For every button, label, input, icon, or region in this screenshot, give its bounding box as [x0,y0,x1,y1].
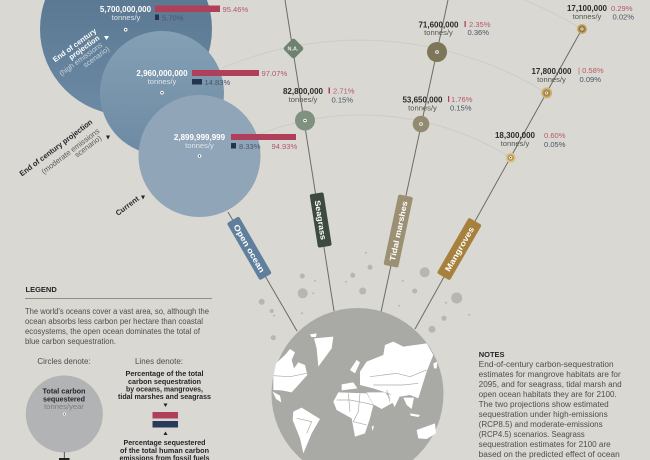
tidal marsh data: upper: 0.36% [468,28,489,37]
sequestration arcs [222,0,582,158]
seagrass data: 2.71% [333,86,355,96]
open ocean moderate emissions data: 2,960,000,000 [136,69,188,78]
open ocean current data: 94.93% [272,142,298,151]
open ocean moderate emissions data: 14.83% [204,78,231,87]
open ocean current data: 2,899,999,999 [174,133,226,142]
label: high emissions projection: (high emissions [57,40,104,78]
open ocean high emissions data: tonnes/y [112,13,141,22]
open ocean moderate emissions data: tonnes/y [148,77,177,86]
mangrove node: lower [506,153,516,163]
lines key: of the total human carbon [120,446,209,455]
notes: (RCP4.5) scenarios. Seagrass [479,430,585,439]
legend text [25,307,210,346]
mangrove node: upper [577,24,587,34]
label: moderate emissions projection: scenario) [73,133,104,159]
tidal marsh data: lower: 0.15% [450,104,472,112]
legend [25,285,212,460]
lines key: tidal marshes and seagrass [118,392,211,401]
notes: (RCP8.5) and moderate-emissions [479,420,603,429]
lines key: carbon sequestration [128,377,201,386]
tidal marsh data: upper: 2.35% [469,20,491,29]
habitat lines [228,0,582,331]
mangrove data: middle: 17,800,000 [531,67,572,76]
label: current: Current [114,194,141,218]
open ocean high emissions data: 5,700,000,000 [100,5,152,14]
mangrove data: upper: 0.29% [611,4,633,13]
mangrove data: lower [495,131,566,149]
open ocean moderate emissions data [136,69,288,87]
label: moderate emissions projection: End of century projection [18,117,94,178]
legend text: The world's oceans cover a vast area, so, although the [25,307,210,316]
globe [272,308,444,460]
notes: NOTES [479,350,505,359]
lines key: Lines denote: [135,357,183,366]
circles key: tonnes/year [44,402,84,411]
legend text: ocean absorbs less carbon per hectare than coastal [25,317,203,326]
open ocean high emissions data: 95.46% [222,5,249,14]
label: high emissions projection: End of century [51,26,99,64]
tidal marsh data: lower [402,95,473,112]
circles key: Circles denote: [37,357,91,366]
tag: tidal marshes [383,194,413,268]
circles key: sequestered [43,394,85,404]
notes: sequestration estimates for 2100 are [479,440,611,449]
droplets [259,252,470,340]
tag: mangroves: Mangroves [443,225,476,273]
mangrove data: middle: tonnes/y [537,75,566,84]
open ocean current data: 8.33% [239,142,261,151]
tidal marsh data: lower: 1.76% [451,95,473,104]
circle: high emissions projection [40,0,212,115]
tag: open ocean [227,216,272,280]
notes: based on the predicted effect of ocean [479,450,620,459]
mangrove data: lower: tonnes/y [501,139,530,148]
legend text: ecosystems, the open ocean dominates the total of [25,327,201,336]
mangrove data: upper: tonnes/y [573,12,602,21]
mangrove data: lower: 18,300,000 [495,131,536,140]
notes: The two projections show estimated [479,400,609,409]
open ocean high emissions data: 5.70% [162,14,184,22]
seagrass node [295,110,315,130]
N.A. marker: N.A. [288,46,299,52]
label: high emissions projection: projection [67,33,102,62]
seagrass data: 0.15% [332,96,353,104]
open ocean current data: tonnes/y [185,141,214,150]
tag: open ocean: Open ocean [231,223,266,274]
tag: seagrass [310,192,332,248]
label: high emissions projection: scenario) [81,44,111,69]
mangrove data: lower: 0.05% [544,140,566,149]
seagrass data [283,86,355,104]
circles key: Total carbon [42,386,86,396]
circles key [26,357,103,460]
legend text: blue carbon sequestration. [25,337,116,346]
tidal marsh data: lower: 53,650,000 [402,96,443,104]
lines key: Percentage of the total [126,369,204,378]
circle: moderate emissions projection [100,31,224,155]
N.A. marker [283,38,304,59]
mangrove data: middle: 0.09% [580,75,601,84]
legend heading: LEGEND [26,285,57,294]
tidal marsh data: upper [418,20,491,37]
label: moderate emissions projection: (moderate emissions [39,126,101,176]
tidal marsh data: lower: tonnes/y [408,104,437,112]
tidal marsh data: upper: tonnes/y [424,28,453,37]
notes: open ocean habitats they are for 2100. [479,390,617,399]
tag: mangroves [437,218,482,280]
notes: End-of-century carbon-sequestration [479,360,614,369]
tidal marsh node: upper [427,42,447,62]
mangrove node: middle [541,88,552,98]
notes [479,350,622,459]
tag: tidal marshes: Tidal marshes [388,200,410,262]
notes: estimates for mangrove habitats are for [479,370,621,379]
mangrove data: middle: | 0.58% [578,66,604,75]
mangrove data: upper: 0.02% [612,12,634,22]
label: high emissions projection [51,26,111,78]
notes: sequestration under high-emissions [479,410,608,419]
tidal marsh data: upper: 71,600,000 [418,20,459,30]
mangrove data: lower: 0.60% [544,131,566,140]
circle: current [138,95,260,217]
lines key: by oceans, mangroves, [126,384,203,394]
tidal marsh node: lower [413,116,429,132]
notes: 2095, and for seagrass, tidal marsh and [479,380,622,389]
open ocean high emissions data [100,5,249,22]
tag: seagrass: Seagrass [313,200,328,241]
lines key: Percentage sequestered [124,438,206,447]
mangrove data: upper [567,4,634,22]
seagrass data: tonnes/y [289,95,318,104]
mangrove data: upper: 17,100,000 [567,4,608,13]
seagrass data: 82,800,000 [283,87,324,96]
lines key [118,357,211,460]
open ocean moderate emissions data: 97.07% [262,69,288,78]
open ocean current data [174,133,298,151]
mangrove data: middle [531,66,604,84]
